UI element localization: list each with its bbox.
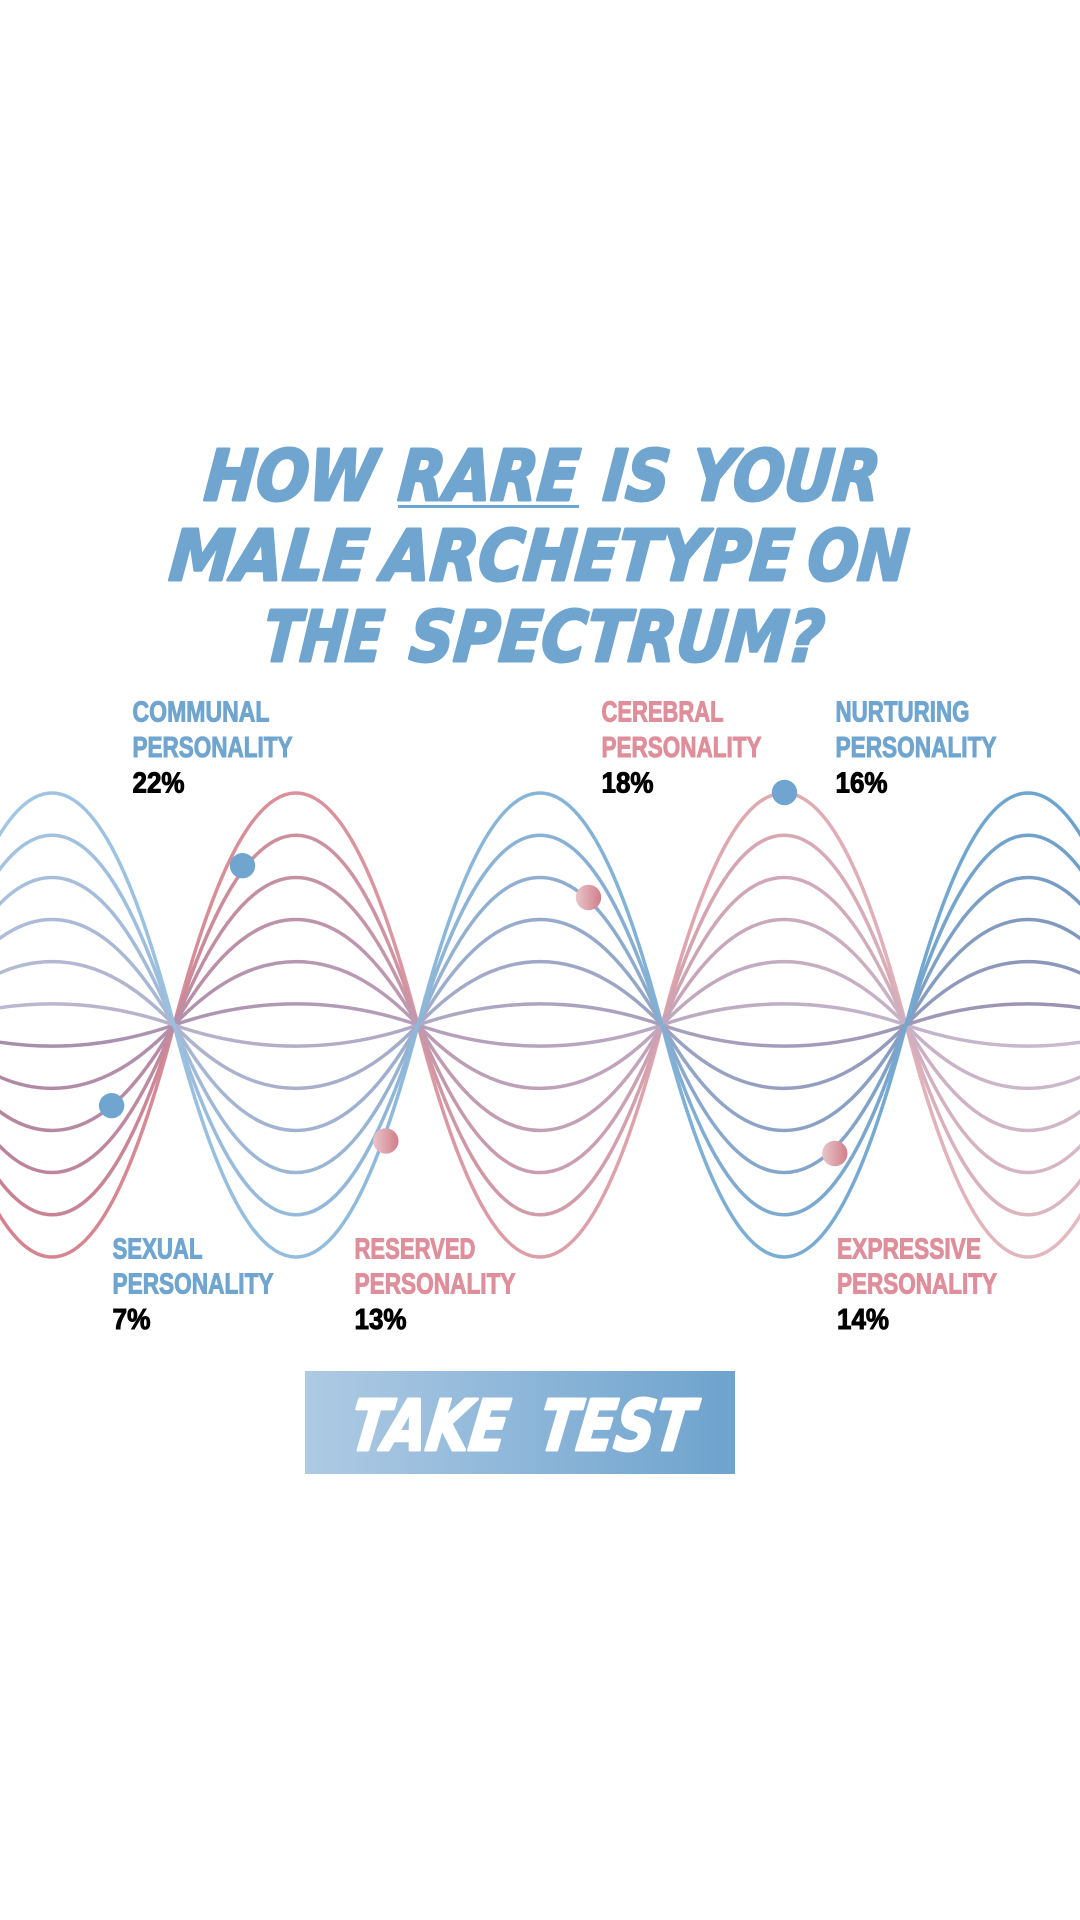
label: sexual personality 7%: PERSONALITY (112, 1268, 274, 1300)
marker: communal (230, 853, 255, 878)
label: communal personality 22% (132, 696, 292, 800)
label: cerebral personality 18%: CEREBRAL (602, 696, 724, 728)
marker: nurturing (772, 780, 797, 805)
label: nurturing personality 16%: NURTURING (836, 696, 970, 728)
button: take test: TAKE (346, 1385, 514, 1467)
label: expressive personality 14%: 14% (837, 1304, 889, 1336)
marker: cerebral (576, 885, 601, 910)
label: sexual personality 7%: SEXUAL (112, 1234, 202, 1266)
title: MALE (167, 515, 372, 597)
label: communal personality 22%: COMMUNAL (132, 696, 270, 728)
title: HOW (202, 435, 384, 517)
label: cerebral personality 18%: 18% (602, 768, 654, 800)
label: communal personality 22%: PERSONALITY (132, 732, 292, 764)
label: nurturing personality 16% (836, 696, 996, 800)
title: THE (261, 596, 387, 678)
label: reserved personality 13%: PERSONALITY (354, 1268, 516, 1300)
marker: expressive (822, 1141, 848, 1166)
marker: reserved (373, 1128, 398, 1154)
label: expressive personality 14%: PERSONALITY (837, 1268, 997, 1300)
title: YOUR (689, 435, 884, 517)
button: take test: TEST (535, 1385, 703, 1467)
label: nurturing personality 16%: 16% (836, 768, 888, 800)
label: cerebral personality 18%: PERSONALITY (602, 732, 762, 764)
title (167, 435, 912, 678)
title: ARCHETYPE (375, 515, 797, 597)
label: reserved personality 13%: RESERVED (354, 1234, 476, 1266)
label: reserved personality 13%: 13% (354, 1304, 407, 1336)
wave spectrum chart (0, 793, 1080, 1257)
title: SPECTRUM? (407, 596, 828, 678)
label: sexual personality 7% (112, 1234, 274, 1336)
label: expressive personality 14% (837, 1234, 997, 1336)
label: reserved personality 13% (354, 1234, 516, 1336)
label: cerebral personality 18% (602, 696, 762, 800)
button: take test (305, 1371, 735, 1474)
title: RARE (396, 435, 583, 517)
title: IS (601, 435, 674, 517)
label: nurturing personality 16%: PERSONALITY (836, 732, 996, 764)
title: ON (805, 515, 912, 597)
marker: sexual (99, 1093, 124, 1118)
label: sexual personality 7%: 7% (112, 1304, 151, 1336)
label: expressive personality 14%: EXPRESSIVE (837, 1234, 981, 1266)
label: communal personality 22%: 22% (132, 768, 185, 800)
